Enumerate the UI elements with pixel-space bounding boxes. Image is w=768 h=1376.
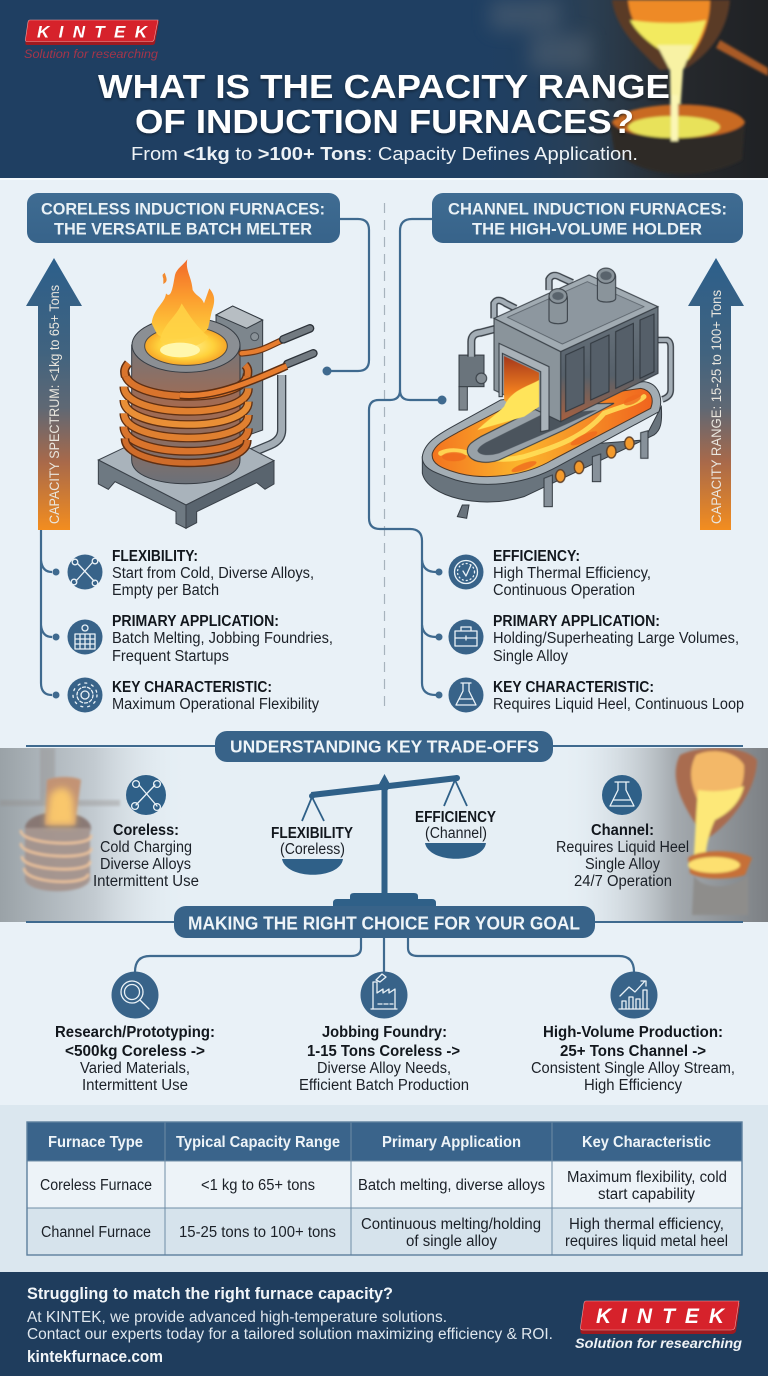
footer text: kintekfurnace.com [27,1348,163,1366]
text: key characteristic [493,679,744,713]
icon: flask [602,775,642,815]
goal: high-volume production: High Efficiency [584,1077,682,1094]
goal: jobbing foundry: Jobbing Foundry: [322,1024,447,1041]
goal: jobbing foundry: Diverse Alloy Needs, [317,1060,451,1077]
title [98,68,670,140]
connectors: goals [135,938,634,972]
logo [24,20,159,61]
panel: coreless features [41,530,333,713]
goal: research: Varied Materials, [80,1060,190,1077]
illustration: channel furnace [422,268,671,518]
text: efficiency [493,548,651,599]
table row: coreless: start capability [598,1186,695,1203]
icon: crossed tools [68,554,102,590]
text: primary application: Frequent Startups [112,648,229,665]
footer banner [0,1272,768,1376]
icon: briefcase [448,620,484,654]
heading: channel: CHANNEL INDUCTION FURNACES: [448,200,727,218]
connector lines: channel [369,219,446,698]
scale label: efficiency: EFFICIENCY [415,809,497,826]
icon: balance scale [282,774,486,910]
table row: channel: Channel Furnace [41,1224,151,1241]
connector lines: coreless [322,219,369,376]
goal: jobbing foundry [299,972,469,1094]
text: key characteristic: Maximum Operational Flexibility [112,696,319,713]
footer text [27,1285,553,1366]
title: WHAT IS THE CAPACITY RANGE [98,68,670,105]
callout: channel trade-offs: Single Alloy [585,856,660,873]
table header row: Furnace Type [48,1134,143,1151]
subtitle: From <1kg to >100+ Tons : Capacity Defines Application. [131,143,638,164]
callout: coreless trade-offs [93,775,199,890]
icon: growth chart [610,972,658,1018]
footer logo: Solution for researching [575,1336,743,1351]
table row: coreless [27,1161,742,1208]
icon: magnifier [112,972,158,1018]
icon: crossed tools [126,775,166,815]
table row: coreless: Maximum flexibility, cold [567,1169,727,1186]
heading: coreless [27,193,340,243]
section heading: right choice: MAKING THE RIGHT CHOICE FOR YOUR GOAL [188,914,580,934]
panel: channel features [448,548,744,713]
table row: channel: Continuous melting/holding [361,1216,541,1233]
icon: batch grid [68,620,102,654]
text: flexibility [112,548,314,599]
goal: research: <500kg Coreless -> [65,1043,205,1060]
goal: jobbing foundry: Efficient Batch Production [299,1077,469,1094]
goal: research: Research/Prototyping: [55,1024,215,1041]
illustration: coreless furnace [98,259,313,528]
footer logo: KINTEK [596,1305,726,1328]
section heading: key trade-offs [26,731,743,762]
callout: coreless trade-offs: Diverse Alloys [100,856,191,873]
icon: factory [360,972,408,1018]
header banner [0,0,768,178]
logo: Solution for researching [24,49,159,61]
arrow: coreless capacity spectrum [26,258,82,530]
table header row: Typical Capacity Range [176,1134,340,1151]
text: key characteristic: KEY CHARACTERISTIC: [112,679,272,696]
photo: coreless coil [0,748,120,891]
goal: jobbing foundry: 1-15 Tons Coreless -> [307,1043,460,1060]
scale label: flexibility [271,825,354,858]
header photo: molten metal pouring from ladle [470,0,768,178]
callout: coreless trade-offs: Coreless: [113,822,179,839]
text: efficiency: Continuous Operation [493,582,635,599]
scale label: efficiency [415,809,497,842]
table row: channel: 15-25 tons to 100+ tons [179,1224,336,1241]
callout: channel trade-offs: Requires Liquid Heel [556,839,689,856]
photo: pouring ladle [676,748,757,915]
arrow: coreless capacity spectrum: CAPACITY SPECTRUM: <1kg to 65+ Tons [47,285,62,524]
text: primary application [112,613,333,665]
text: primary application: Single Alloy [493,648,568,665]
goal: high-volume production: Consistent Single Alloy Stream, [531,1060,735,1077]
scale label: flexibility: FLEXIBILITY [271,825,354,842]
section heading: key trade-offs: UNDERSTANDING KEY TRADE-OFFS [230,736,539,756]
table row: coreless: Batch melting, diverse alloys [358,1177,545,1194]
callout: coreless trade-offs: Cold Charging [100,839,192,856]
callout: channel trade-offs [556,775,689,890]
scale label: flexibility: (Coreless) [280,841,345,858]
text: efficiency: EFFICIENCY: [493,548,580,565]
title: OF INDUCTION FURNACES? [135,103,634,140]
goal: high-volume production: 25+ Tons Channel -> [560,1043,706,1060]
table header row: Primary Application [382,1134,521,1151]
text: key characteristic: Requires Liquid Heel, Continuous Loop [493,696,744,713]
heading: coreless: CORELESS INDUCTION FURNACES: [41,200,325,218]
goal: research [55,972,215,1094]
text: primary application: PRIMARY APPLICATION: [493,613,660,630]
text: flexibility: Empty per Batch [112,582,219,599]
panel: comparison table [0,1105,768,1272]
text: flexibility: Start from Cold, Diverse Alloys, [112,565,314,582]
table row: coreless: <1 kg to 65+ tons [201,1177,315,1194]
text: flexibility: FLEXIBILITY: [112,548,198,565]
footer text: At KINTEK, we provide advanced high-temperature solutions. [27,1309,447,1326]
text: primary application: PRIMARY APPLICATION: [112,613,279,630]
icon: gear [68,678,102,712]
table row: channel: of single alloy [406,1233,497,1250]
goal: high-volume production: High-Volume Production: [543,1024,723,1041]
table row: channel [27,1208,742,1255]
panel: trade-offs background [0,747,768,922]
arrow: channel capacity range: CAPACITY RANGE: 15-25 to 100+ Tons [709,290,724,524]
table header row: Key Characteristic [582,1134,711,1151]
icon: flask [448,678,484,712]
icon: gauge [448,554,484,590]
scale label: efficiency: (Channel) [425,825,487,842]
heading: coreless: THE VERSATILE BATCH MELTER [54,220,312,238]
callout: channel trade-offs: Channel: [591,822,654,839]
logo: KINTEK [37,22,149,42]
text: primary application: Holding/Superheating Large Volumes, [493,630,739,647]
heading: channel: THE HIGH-VOLUME HOLDER [472,220,702,238]
center dashed divider [384,203,386,708]
arrow: channel capacity range [688,258,744,530]
callout: coreless trade-offs: Intermittent Use [93,873,199,890]
goal: high-volume production [531,972,735,1094]
table header row [27,1122,742,1161]
footer text: Struggling to match the right furnace capacity? [27,1285,393,1303]
footer logo [575,1301,743,1351]
footer text: Contact our experts today for a tailored solution maximizing efficiency & ROI. [27,1326,553,1343]
text: primary application: Batch Melting, Jobbing Foundries, [112,630,333,647]
heading: channel [432,193,743,243]
table row: coreless: Coreless Furnace [40,1177,152,1194]
goal: research: Intermittent Use [82,1077,188,1094]
section heading: right choice [26,906,743,938]
text: key characteristic [112,679,319,713]
text: key characteristic: KEY CHARACTERISTIC: [493,679,654,696]
table row: channel: High thermal efficiency, [569,1216,724,1233]
table row: channel: requires liquid metal heel [565,1233,728,1250]
text: primary application [493,613,739,665]
callout: channel trade-offs: 24/7 Operation [574,873,672,890]
text: efficiency: High Thermal Efficiency, [493,565,651,582]
